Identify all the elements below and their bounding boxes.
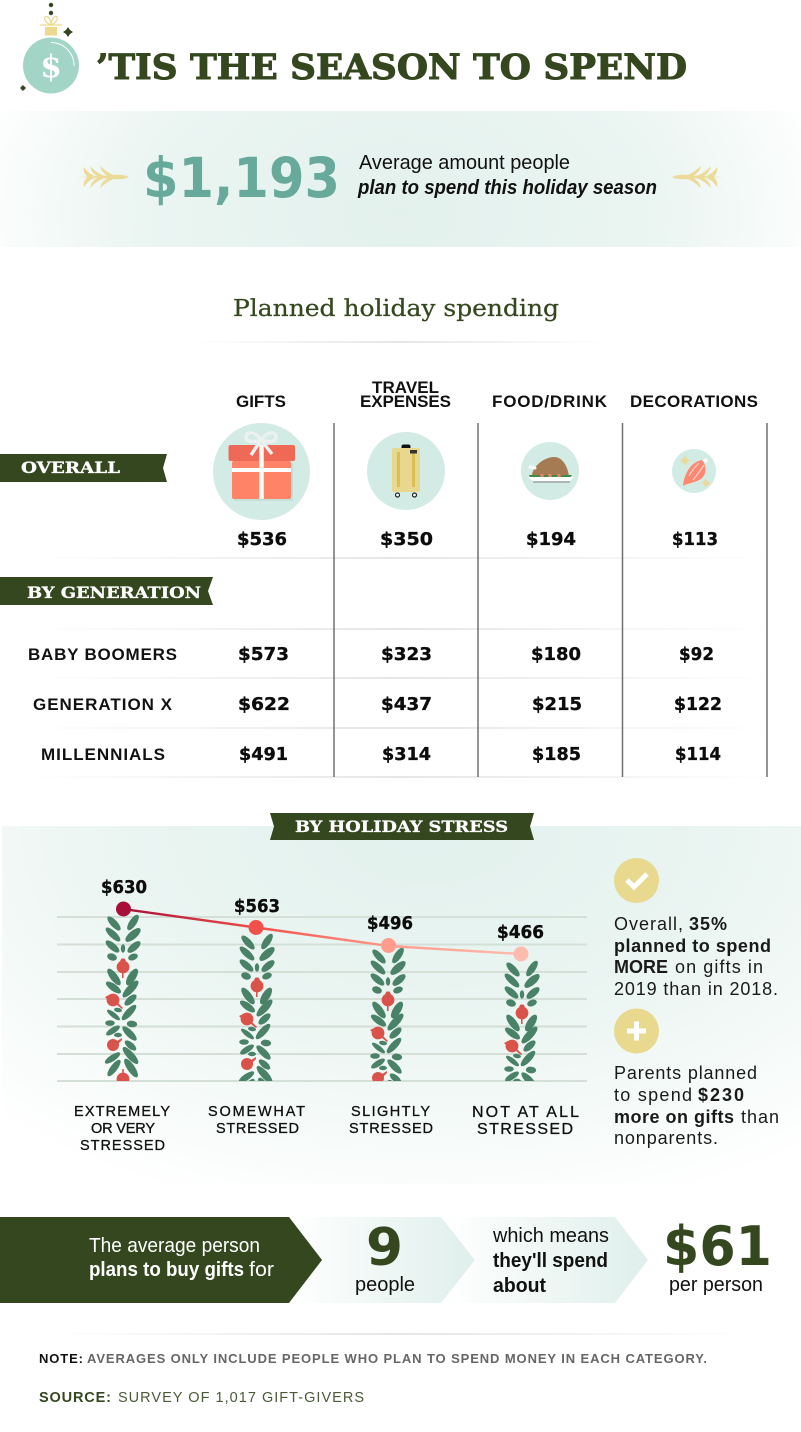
column headers <box>236 378 758 411</box>
note: AVERAGES ONLY INCLUDE PEOPLE WHO PLAN TO SPEND MONEY IN EACH CATEGORY. <box>87 1351 707 1366</box>
icon: check badge <box>614 858 659 903</box>
row: generation x <box>33 694 722 715</box>
source: SOURCE: <box>39 1390 111 1406</box>
source: SURVEY OF 1,017 GIFT-GIVERS <box>118 1390 364 1406</box>
row: millennials: $114 <box>675 744 721 765</box>
row: generation x: $622 <box>238 694 290 715</box>
text: parents note: Parents planned <box>614 1063 757 1083</box>
column headers: DECORATIONS <box>630 392 758 411</box>
chart: spending trend line <box>116 902 528 962</box>
row: generation x: $215 <box>532 694 582 715</box>
row: millennials: $185 <box>532 744 581 765</box>
chevron: number of people <box>290 1217 475 1303</box>
stat: 61 dollars per person: per person <box>669 1274 763 1296</box>
row: baby boomers: BABY BOOMERS <box>28 645 177 664</box>
column headers: EXPENSES <box>360 392 451 411</box>
column headers: GIFTS <box>236 392 286 411</box>
text: which means <box>492 1225 609 1297</box>
banner: overall: OVERALL <box>21 458 120 477</box>
row: millennials: MILLENNIALS <box>41 745 165 764</box>
row: generation x: $437 <box>381 694 432 715</box>
chart category labels: STRESSED <box>80 1138 165 1154</box>
text: average description: plan to spend this holiday season <box>357 176 657 199</box>
row: baby boomers: $573 <box>238 644 289 665</box>
table: planned spending <box>0 378 770 778</box>
row: baby boomers <box>28 644 714 665</box>
row: overall values: $194 <box>526 529 576 550</box>
panel: gift flow <box>0 1215 772 1303</box>
banner: by generation <box>0 577 213 605</box>
text: 35 percent note: on gifts in <box>675 957 763 977</box>
chart: garland columns <box>104 914 540 1081</box>
row: millennials <box>41 744 721 765</box>
chevron: average person: The average person <box>89 1235 260 1257</box>
row: overall values: $536 <box>237 529 287 550</box>
chart values: $563 <box>234 896 280 917</box>
text: parents note: $230 <box>698 1085 744 1105</box>
icon: gift <box>213 423 310 520</box>
icon: left wheat arrow <box>78 166 129 188</box>
text: parents note: to spend <box>614 1085 692 1105</box>
text: 35 percent note: 35% <box>689 914 727 934</box>
row: millennials: $491 <box>239 744 288 765</box>
column headers: TRAVEL <box>372 378 439 397</box>
row: generation x: $122 <box>674 694 722 715</box>
chart values: $466 <box>497 922 544 943</box>
chart category labels: STRESSED <box>216 1121 299 1137</box>
row: baby boomers: $92 <box>679 644 714 665</box>
icon: money ornament <box>20 3 79 93</box>
chart category labels: NOT AT ALL <box>472 1104 579 1121</box>
icon: right wheat arrow <box>672 166 723 188</box>
chevron: average person: for <box>249 1259 274 1281</box>
icon: turkey <box>521 442 579 500</box>
chart category labels: STRESSED <box>477 1121 573 1138</box>
text: average description: Average amount people <box>359 151 570 174</box>
chevron: average person: plans to buy gifts <box>89 1259 244 1281</box>
text: parents note: nonparents. <box>614 1128 718 1148</box>
chart values <box>101 877 544 943</box>
text: 35 percent note: Overall, <box>614 914 683 934</box>
icon: suitcase <box>367 432 445 510</box>
row: generation x: GENERATION X <box>33 695 173 714</box>
row: millennials: $314 <box>382 744 431 765</box>
icon: ornament <box>672 449 716 493</box>
heading: planned holiday spending: Planned holiday spending <box>233 296 559 322</box>
chart category labels: EXTREMELY <box>74 1104 170 1120</box>
stat: 9 people: people <box>355 1274 415 1296</box>
title: ’TIS THE SEASON TO SPEND <box>96 48 687 88</box>
banner: by generation: BY GENERATION <box>27 583 201 602</box>
icon: plus badge <box>614 1008 659 1054</box>
chart category labels: SLIGHTLY <box>351 1104 430 1120</box>
row: baby boomers: $323 <box>381 644 432 665</box>
panel: holiday stress <box>2 813 801 1184</box>
chart category labels <box>74 1104 579 1154</box>
big number: average spend: $1,193 <box>143 146 340 210</box>
text: parents note <box>614 1063 779 1148</box>
panel: average spend band <box>0 111 801 247</box>
text: parents note: than <box>741 1107 779 1127</box>
banner: by holiday stress: BY HOLIDAY STRESS <box>295 817 508 836</box>
stat: 9 people <box>355 1218 415 1296</box>
column headers: FOOD/DRINK <box>492 392 608 411</box>
banner: overall <box>0 454 167 482</box>
text: which means: they'll spend <box>493 1250 608 1272</box>
note: NOTE: <box>39 1351 83 1366</box>
row: overall values: $113 <box>672 529 718 550</box>
chart values: $496 <box>367 913 413 934</box>
chart category labels: OR VERY <box>91 1121 155 1137</box>
stat: 9 people: 9 <box>366 1218 403 1278</box>
stat: 61 dollars per person: $61 <box>663 1215 772 1278</box>
chart values: $630 <box>101 877 147 898</box>
text: 35 percent note: planned to spend <box>614 936 771 956</box>
chart category labels: SOMEWHAT <box>208 1104 305 1120</box>
text: 35 percent note: MORE <box>614 957 668 977</box>
row: baby boomers: $180 <box>531 644 581 665</box>
text: which means: about <box>493 1275 546 1297</box>
chart category labels: STRESSED <box>349 1121 433 1137</box>
text: parents note: more on gifts <box>614 1107 734 1127</box>
chevron: per-person result <box>444 1217 648 1303</box>
row: overall values <box>237 529 718 550</box>
row: overall values: $350 <box>380 529 433 550</box>
banner: by holiday stress <box>270 813 534 840</box>
text: 35 percent note: 2019 than in 2018. <box>614 979 778 999</box>
chevron: average person <box>0 1217 322 1303</box>
icon: money ornament: $ <box>40 49 62 85</box>
text: 35 percent note <box>614 914 778 999</box>
text: which means: which means <box>492 1225 609 1247</box>
text: average description <box>357 151 657 199</box>
